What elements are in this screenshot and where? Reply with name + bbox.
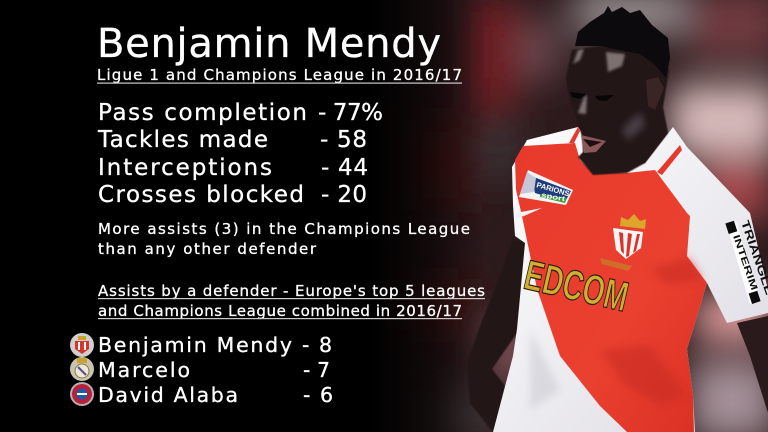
stat: interceptions	[98, 155, 368, 181]
shirt fold shadows	[600, 258, 703, 405]
hair	[575, 6, 670, 78]
stat: pass completion: - 77%	[318, 100, 383, 126]
icon: Real Madrid badge	[70, 357, 94, 381]
assists table	[70, 333, 333, 407]
assists heading: and Champions League combined in 2016/17	[98, 302, 462, 320]
right arm	[737, 316, 768, 413]
row: Alaba: - 6	[303, 383, 333, 407]
sleeve sponsor: TRIANGLE	[738, 219, 768, 297]
ear	[646, 77, 664, 110]
stat: tackles: Tackles made	[97, 127, 268, 153]
row: Marcelo: - 7	[303, 358, 330, 382]
icon: Bayern badge	[70, 382, 94, 406]
stat: crosses blocked: Crosses blocked	[98, 182, 304, 208]
season stats	[97, 100, 383, 208]
stat: interceptions: Interceptions	[98, 155, 272, 181]
stat: pass completion: Pass completion	[98, 100, 307, 126]
stat: interceptions: - 44	[321, 155, 368, 181]
player photo	[467, 6, 768, 432]
eyes	[570, 92, 614, 101]
mouth	[581, 135, 606, 153]
row: Marcelo	[70, 357, 330, 382]
assists heading: Assists by a defender - Europe's top 5 leagues	[98, 282, 485, 300]
row: Alaba: David Alaba	[98, 383, 238, 407]
stat: crosses blocked: - 20	[321, 182, 367, 208]
icon: Monaco badge	[70, 333, 94, 357]
title: Benjamin Mendy	[97, 21, 441, 67]
champions league assists note: than any other defender	[98, 240, 317, 258]
red shirt panel	[515, 143, 707, 432]
sleeve sponsor	[725, 219, 768, 304]
neck highlight	[622, 112, 645, 140]
row: Mendy: Benjamin Mendy	[98, 333, 292, 357]
row: Alaba	[70, 382, 333, 407]
collar trim	[657, 145, 682, 175]
swoosh	[516, 208, 542, 218]
champions league assists note: More assists (3) in the Champions League	[98, 220, 470, 238]
white shirt base	[493, 127, 768, 432]
neck and face	[566, 46, 669, 175]
club crest on shirt	[600, 214, 646, 271]
stat: tackles	[97, 127, 367, 153]
sleeve sponsor: INTERIM	[730, 233, 759, 292]
subtitle: Ligue 1 and Champions League in 2016/17	[97, 66, 462, 84]
row: Marcelo: Marcelo	[98, 358, 190, 382]
sponsor patch: sport	[541, 192, 566, 203]
shirt sponsor lettering: EDCOM	[520, 251, 633, 320]
stat: tackles: - 58	[320, 127, 367, 153]
white panel shading	[530, 330, 560, 410]
left arm	[467, 240, 525, 431]
sponsor patch	[519, 170, 573, 205]
row: Mendy: - 8	[302, 333, 332, 357]
skin highlights	[573, 49, 625, 114]
assists heading	[98, 282, 485, 320]
sponsor patch: PARIONS	[535, 180, 571, 198]
champions league assists note	[98, 220, 470, 258]
